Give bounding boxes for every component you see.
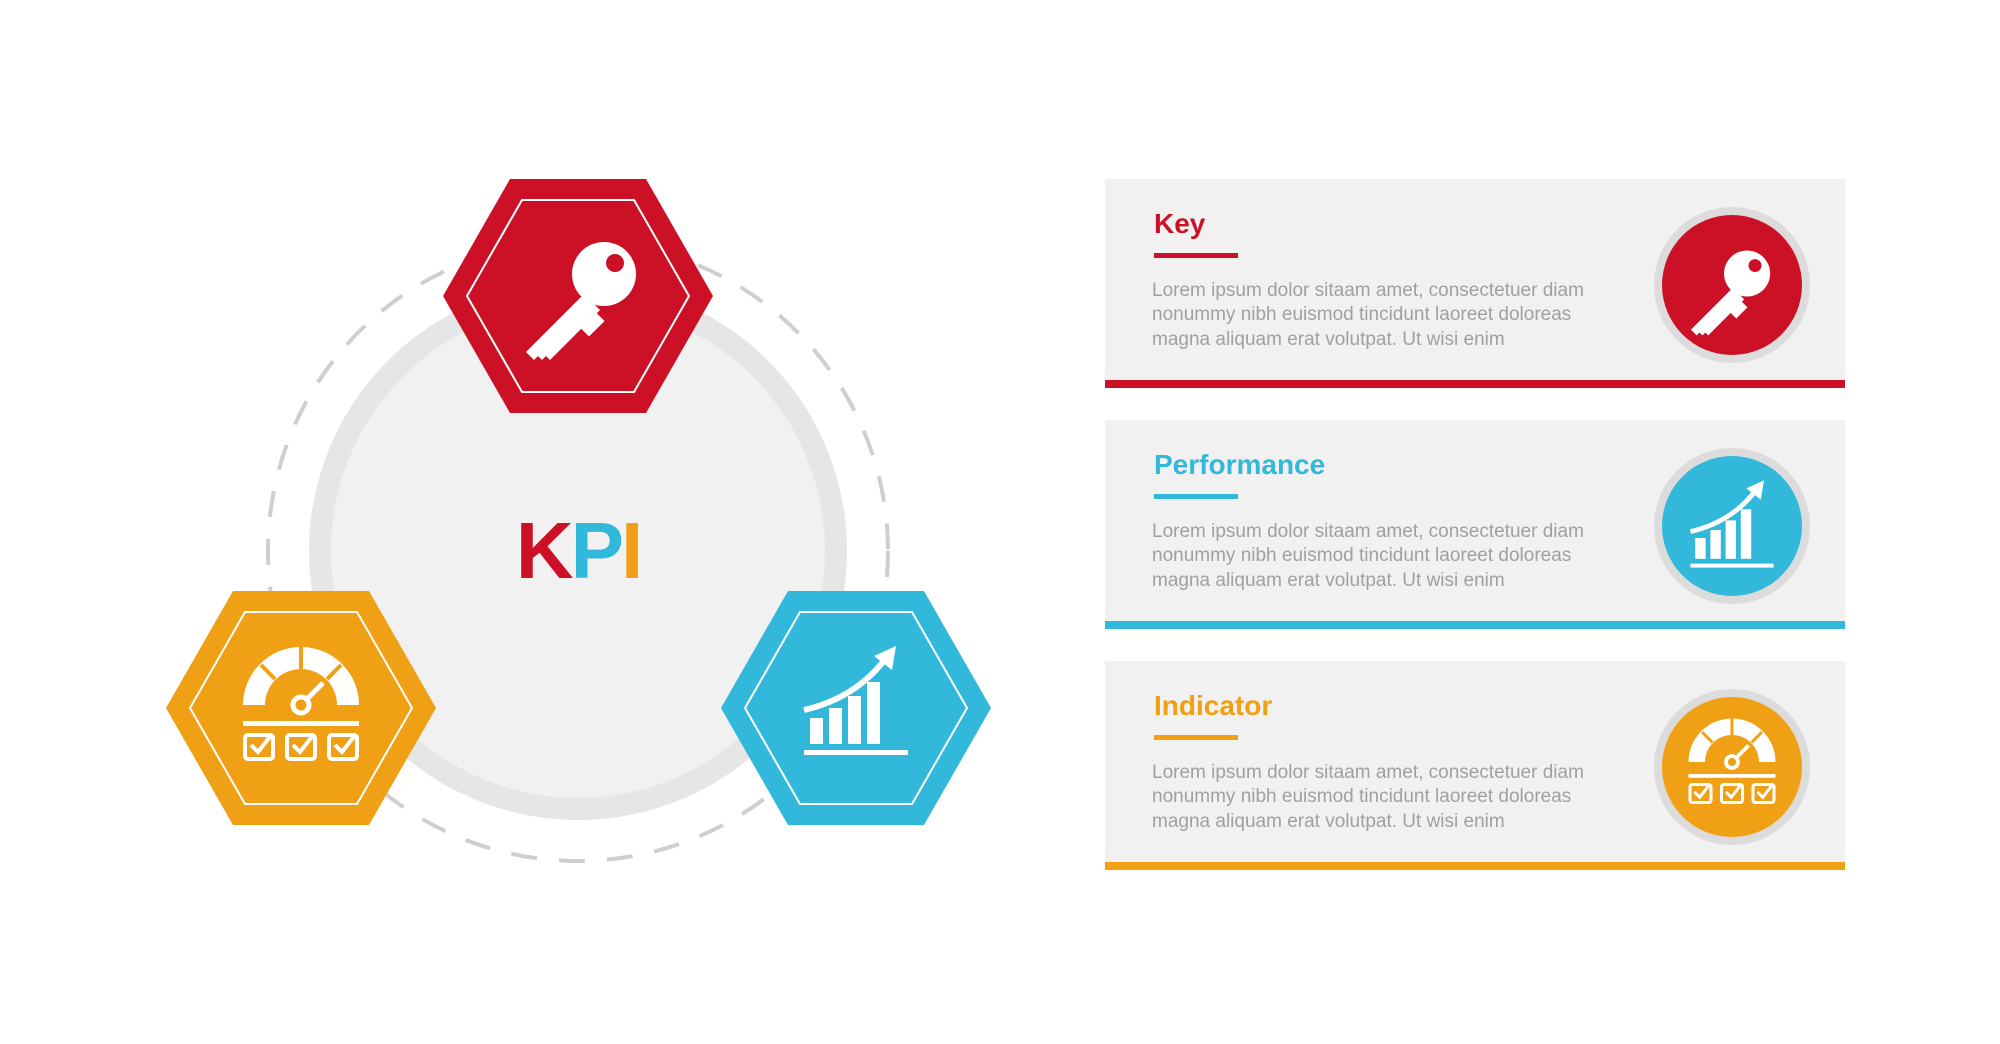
hexagon: key [443,179,713,413]
text block: Lorem ipsum dolor sitaam amet, consectetuer diam [1152,762,1584,783]
icon: gauge circle [1654,689,1810,845]
text block: magna aliquam erat volutpat. Ut wisi enim [1152,811,1505,832]
icon: gauge [243,645,359,759]
text block: nonummy nibh euismod tincidunt laoreet doloreas [1152,304,1571,325]
text block: nonummy nibh euismod tincidunt laoreet doloreas [1152,545,1571,566]
central circle [320,293,836,809]
text block: Lorem ipsum dolor sitaam amet, consectetuer diam [1152,280,1584,301]
panel: Performance [1105,420,1845,629]
panel: Key [1105,179,1845,388]
icon: chart circle [1654,448,1810,604]
icon: key circle [1654,207,1810,363]
KPI title: KPI [516,506,640,595]
heading: Indicator: Indicator [1154,690,1272,721]
text block: nonummy nibh euismod tincidunt laoreet doloreas [1152,786,1571,807]
dashed outer ring [268,241,888,861]
panel: Indicator [1105,661,1845,870]
heading: Performance: Performance [1154,449,1325,480]
text block: magna aliquam erat volutpat. Ut wisi enim [1152,329,1505,350]
text block: Lorem ipsum dolor sitaam amet, consectetuer diam [1152,521,1584,542]
hexagon: indicator [166,591,436,825]
text block: magna aliquam erat volutpat. Ut wisi enim [1152,570,1505,591]
heading: Key: Key [1154,208,1206,239]
hexagon: performance [721,591,991,825]
icon: chart [804,646,908,755]
icon: key [526,242,636,360]
